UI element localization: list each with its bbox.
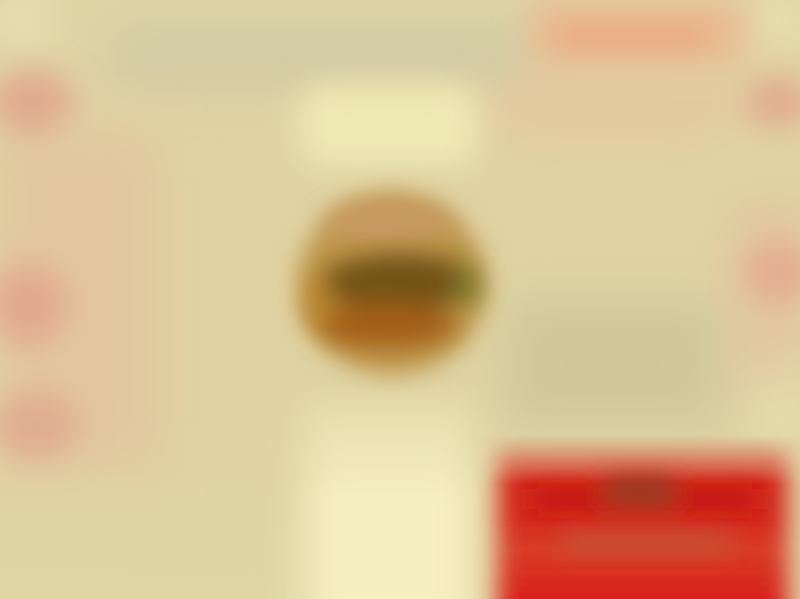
left pink labels <box>0 70 80 459</box>
burger fillings <box>306 254 480 347</box>
right pink labels <box>744 76 800 302</box>
burger base <box>298 194 486 374</box>
burger top bun <box>324 202 452 242</box>
left column panel <box>0 130 160 470</box>
top right peach heading <box>530 0 745 65</box>
callout text band <box>560 532 730 552</box>
red callout panel <box>498 435 788 599</box>
top header band <box>0 0 800 82</box>
right panel shade <box>500 80 800 460</box>
central burger icon <box>298 194 486 374</box>
centre top pale panel <box>300 85 480 165</box>
lower left shade <box>0 470 300 599</box>
centre bottom pale column <box>305 380 475 599</box>
callout heading <box>530 478 760 510</box>
